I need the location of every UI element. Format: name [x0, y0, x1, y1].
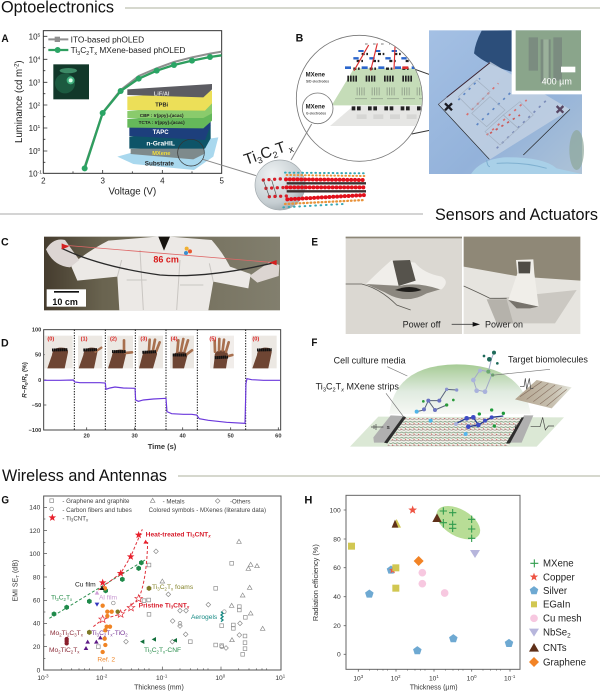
y axis tick labels [29, 328, 41, 434]
x axis tick labels: 3 [100, 176, 105, 185]
hand photo: state 4: (4) [171, 337, 178, 343]
label F: F [311, 337, 318, 349]
y axis tick labels [29, 32, 42, 179]
y axis tick labels: 50 [35, 353, 41, 359]
drain electrode [506, 415, 533, 443]
y axis title: Luminance (cd m [14, 69, 25, 143]
legend: - Metals [163, 499, 185, 506]
y axis tick labels: 100 [29, 551, 41, 558]
hand photo: state 2 [107, 336, 133, 368]
x axis tick labels: 10 [391, 676, 398, 683]
connector lines [412, 69, 487, 134]
x axis tick labels: 3 [361, 674, 364, 679]
label: power off to power on: Power on [485, 319, 523, 329]
device layer stack: TAPC [153, 130, 169, 136]
device layer stack: n-GraHIL [146, 140, 175, 147]
y axis title: ) [14, 60, 25, 64]
hand photo: state 4 [170, 336, 194, 368]
y axis tick labels: 60 [333, 565, 341, 572]
x axis tick labels: 5 [219, 176, 224, 185]
source electrode: S [387, 425, 390, 430]
y axis tick labels: 100 [330, 507, 341, 514]
panel A: luminance versus voltage chart [1, 31, 256, 198]
x axis tick labels [353, 674, 516, 683]
Ti3C2Tx rotated label: x [285, 144, 295, 156]
photo: power off [346, 237, 462, 334]
y axis title: (dB) [13, 560, 20, 575]
source electrode [373, 415, 406, 443]
data series labels: x [186, 605, 190, 610]
y axis title: -2 [15, 63, 21, 69]
legend: Colored symbols - MXenes (literature data) [149, 507, 266, 514]
y axis title: EMI SE [13, 578, 20, 602]
molecule illustration: Ti3C2Tx nanosheet [255, 160, 367, 210]
panel H: radiation efficiency scatter chart [304, 495, 586, 692]
legend: Graphene [543, 657, 586, 668]
device layer stack [117, 84, 218, 170]
x axis tick labels: 4 [160, 176, 165, 185]
data series labels: Cu film [75, 582, 96, 589]
silver markers [365, 565, 513, 654]
S/D electrode label [306, 72, 329, 83]
device layer stack: CBP : Ir(ppy)₂(acac) [140, 113, 184, 118]
data series labels: Mo [50, 630, 59, 637]
green dashed Ti3C2Tx trend [49, 560, 145, 618]
x axis tick labels: -3 [45, 673, 49, 678]
plot frame and ticks [44, 496, 281, 670]
data series labels: -TiO [113, 630, 125, 637]
copper markers [389, 505, 417, 573]
hand photo: state 0: (0) [47, 337, 54, 343]
data series labels: Mo [49, 647, 58, 654]
label: target biomolecules: Target biomolecules [508, 355, 588, 365]
x axis tick labels: 10 [215, 675, 223, 682]
Ti3C2Tx rotated label: Ti [242, 149, 259, 169]
data series labels: T [167, 584, 171, 591]
inset: green device photo [53, 64, 89, 99]
data series labels: T [159, 647, 163, 654]
legend [48, 34, 185, 57]
y axis title: (%) [22, 362, 29, 374]
data series labels: Heat-treated Ti [146, 531, 192, 538]
y axis tick labels: 20 [33, 644, 41, 651]
legend: Ti [71, 45, 77, 55]
legend: -Others [230, 499, 251, 506]
hand photo: state 5 [209, 336, 234, 368]
label: MXene strips [316, 381, 404, 417]
x axis tick labels: -1 [163, 673, 168, 678]
x axis tick labels: 2 [41, 176, 46, 185]
hand photo: state 1: (1) [81, 337, 88, 343]
label: cell culture media: Cell culture media [334, 356, 406, 366]
red dashed heat-treated trend [98, 529, 148, 590]
y axis tick labels: 10 [29, 101, 38, 110]
legend [529, 559, 586, 668]
data series labels: Ti [152, 584, 157, 591]
x axis tick labels: 10 [467, 676, 474, 683]
panel E: actuator photos [311, 236, 580, 334]
y axis tick labels: 10 [29, 124, 38, 133]
y axis tick labels: −50 [32, 403, 41, 409]
inset microscope image [512, 30, 584, 94]
y axis tick labels: 80 [33, 574, 41, 581]
data series labels: x [207, 534, 211, 539]
legend: MXene-based phOLED [97, 45, 185, 55]
x axis tick labels: 10 [96, 675, 103, 682]
graphene marker [414, 556, 424, 566]
y axis title: 0 [24, 382, 29, 385]
legend: 3 [77, 51, 80, 57]
y axis tick labels: 2 [38, 101, 41, 107]
y axis tick labels: −100 [29, 428, 41, 434]
plot frame and ticks [43, 31, 222, 173]
data series labels: 2 [125, 632, 128, 637]
molecule: upper [471, 351, 499, 394]
legend: - Carbon fibers and tubes [62, 507, 132, 514]
drain electrode: D [515, 424, 519, 429]
data series labels: 3 [97, 632, 100, 637]
x axis tick labels: 2 [398, 674, 401, 679]
x axis tick labels: 10 [504, 676, 511, 683]
legend [49, 498, 266, 523]
panel B: flexible MXene transistor arrays [291, 30, 584, 174]
x axis tick labels: 10 [156, 675, 163, 682]
label C: C [1, 236, 9, 248]
grey ITO curve [85, 52, 222, 167]
y axis tick labels: 0 [37, 667, 41, 674]
legend: ITO-based phOLED [71, 34, 144, 44]
label: power off to power on: Power off [403, 319, 441, 329]
y axis tick labels: 0 [337, 652, 341, 659]
data series labels: T [66, 595, 70, 602]
data series labels: Ti [62, 630, 67, 637]
data series labels: C [99, 630, 104, 637]
x axis tick labels: 0 [223, 673, 226, 678]
hand photo: state 3 [138, 336, 163, 368]
label: MXene strips: 2 [332, 387, 336, 393]
device layer stack: TPBi [155, 103, 169, 109]
Ti3C2Tx rotated label: 3 [256, 155, 264, 166]
y axis tick labels: 140 [29, 505, 41, 512]
label A: A [1, 33, 9, 45]
label: MXene strips: Ti [316, 381, 323, 391]
y axis tick labels: 3 [38, 78, 41, 84]
y axis tick labels: 120 [29, 528, 41, 535]
legend: Silver [543, 586, 568, 597]
y axis tick labels: 60 [33, 598, 41, 605]
x axis title: Thickness (µm) [410, 685, 458, 692]
hand photo: state 0 repeated [252, 336, 277, 368]
data series labels: 2 [64, 597, 67, 602]
label: target biomolecules [492, 355, 588, 375]
data series labels: 3 [56, 597, 59, 602]
culture media dome [389, 364, 531, 414]
device layer stack: TCTA : Ir(ppy)₂(acac) [139, 120, 185, 125]
legend: C [80, 45, 86, 55]
data series labels: C [69, 630, 74, 637]
data series labels: 2 [58, 649, 61, 654]
x axis tick labels: 10 [429, 676, 436, 683]
data series labels: TiC [61, 647, 71, 654]
y axis tick labels [330, 507, 341, 659]
legend: MXene [543, 559, 574, 570]
legend: x [85, 518, 89, 523]
Ti3C2Tx rotated label: T [274, 139, 289, 158]
label: power off to power on [403, 319, 523, 329]
data series labels: 2 [165, 586, 168, 591]
x axis tick labels: -2 [103, 673, 108, 678]
y axis title: R [22, 376, 29, 381]
data series labels: T [73, 647, 77, 654]
signal traces [371, 417, 554, 430]
connector line to molecule [203, 159, 256, 176]
x axis tick labels [84, 434, 281, 440]
x axis tick labels: 0 [474, 674, 477, 679]
label G: G [1, 494, 9, 506]
legend: - Graphene and graphite [62, 498, 130, 505]
data series labels: 3 [157, 586, 160, 591]
hand photo: state 1 [78, 336, 102, 368]
sensor mesh inset [515, 378, 572, 408]
grey reference triangles [160, 539, 265, 642]
molecule: on channel [454, 408, 505, 436]
heading: Wireless and Antennas: Wireless and Antennas [2, 467, 167, 485]
y axis title: / [22, 381, 29, 383]
data series labels: 2 [104, 632, 107, 637]
legend: 3 [71, 518, 74, 523]
data series labels: C [152, 647, 157, 654]
x axis tick labels: 50 [228, 434, 234, 440]
data series labels: -CNF [165, 647, 181, 654]
legend: NbSe [543, 627, 567, 638]
connector to molecule [291, 124, 312, 160]
grey reference diamonds and circles [111, 549, 242, 650]
device layer stack: LiF/Al [154, 91, 170, 97]
divider line [0, 213, 423, 215]
x axis tick labels: 10 [275, 675, 283, 682]
label: MXene strips: MXene strips [344, 381, 399, 391]
y axis tick labels: 40 [333, 594, 341, 601]
legend: 2 [567, 632, 571, 639]
hand photo: state 3: (3) [140, 337, 147, 343]
photograph [44, 237, 280, 310]
x axis tick labels [37, 673, 286, 682]
red dashed pristine trend [93, 542, 148, 627]
data series labels: foams [173, 584, 194, 591]
magnified device circle [296, 35, 423, 161]
G electrode callout circle: MXene [306, 104, 326, 110]
legend: x [94, 51, 97, 57]
hand photo: state 0 repeated: (0) [252, 337, 259, 343]
NbSe2 marker [470, 550, 480, 558]
y axis tick labels: 80 [333, 536, 341, 543]
MXene plus markers [440, 507, 475, 542]
data series labels [49, 531, 218, 663]
G electrode callout circle [302, 93, 333, 124]
legend: 2 [86, 51, 89, 57]
panel D: finger motion sensing chart [1, 328, 281, 440]
x axis tick labels: 60 [275, 434, 281, 440]
x axis tick labels: -1 [511, 674, 516, 679]
y axis title: Radiation efficiency (%) [311, 544, 320, 621]
label: MXene strips: 3 [323, 387, 326, 393]
data series labels: C [59, 595, 64, 602]
label: MXene strips: C [326, 381, 333, 391]
hand photo: state 5: (5) [209, 337, 216, 343]
x axis title: Thickness (mm) [134, 685, 184, 692]
data series labels: Ti [51, 595, 56, 602]
label: cell culture media [334, 356, 407, 376]
Ti3C2Tx rotated label: 2 [271, 149, 279, 160]
S/D electrode label: S/D electrodes [306, 79, 329, 83]
y axis tick labels: 10 [29, 78, 38, 87]
legend: - Ti [62, 515, 71, 522]
y axis tick labels: 0 [38, 147, 41, 153]
data series labels: 2 [59, 632, 62, 637]
data series labels: T [106, 630, 110, 637]
x axis title: Voltage (V) [108, 187, 156, 198]
heading: Sensors and Actuators: Sensors and Actuators [435, 206, 598, 224]
x axis tick labels: 10 [353, 676, 361, 683]
data series labels: 3 [149, 649, 152, 654]
molecule: lower left [415, 388, 458, 423]
green MXene curve [82, 54, 222, 171]
panel D x axis title: Time (s) [148, 442, 177, 451]
device layer stack: MXene [152, 151, 170, 157]
resistance response line [44, 379, 280, 423]
x axis tick labels [41, 176, 224, 185]
legend: Cu mesh [543, 614, 582, 625]
data series labels: 2 [67, 632, 70, 637]
y axis title: 0 [24, 373, 29, 376]
hand photo: state 0 [45, 336, 73, 368]
y axis tick labels: 4 [38, 55, 41, 61]
y axis tick labels: 100 [32, 328, 41, 334]
y axis tick labels: -1 [38, 170, 42, 176]
panel G: EMI shielding scatter chart [1, 494, 286, 692]
data series labels: 2 [71, 649, 74, 654]
data series labels: C [160, 584, 165, 591]
label: MXene strips: x [340, 387, 344, 393]
MXene channel [387, 418, 523, 446]
y axis tick labels: 40 [33, 621, 41, 628]
x axis tick labels: 30 [132, 434, 138, 440]
x axis tick labels: 1 [436, 674, 439, 679]
legend: Copper [543, 572, 575, 583]
data series labels: Pristine Ti [139, 602, 171, 609]
panel C: stretched fibre photo [1, 236, 280, 310]
y axis tick labels: 0 [38, 378, 41, 384]
data series labels: T [77, 630, 81, 637]
data series labels: CNT [173, 602, 187, 609]
coloured MXene markers [64, 586, 223, 654]
data series labels: x [110, 632, 113, 637]
photograph: 86 cm [153, 255, 179, 265]
data series labels: Al film [99, 595, 118, 602]
MXene highlight ellipse [431, 499, 486, 546]
y axis tick labels: 5 [38, 32, 41, 38]
legend: CNT [73, 515, 86, 522]
label: MXene strips: T [336, 381, 342, 391]
x axis tick labels: 40 [180, 434, 186, 440]
y axis tick labels: 10 [29, 32, 38, 41]
y axis title: R−R [22, 385, 29, 398]
label B: B [296, 32, 303, 44]
plot frame and ticks [344, 495, 520, 672]
legend: CNTs [543, 643, 567, 654]
scale bar: 10 cm [52, 297, 78, 307]
photo: power on [464, 237, 580, 334]
x axis tick labels: 20 [84, 434, 90, 440]
x axis tick labels: 1 [283, 673, 286, 678]
data series labels: 3 [192, 534, 195, 539]
grey reference squares [96, 561, 247, 656]
y axis tick labels: 10 [29, 55, 38, 64]
device layer stack: Substrate [145, 160, 174, 167]
inset microscope image: 400 µm [542, 77, 572, 87]
S/D electrode label: MXene [306, 72, 326, 78]
data series labels: 2 [157, 649, 160, 654]
data series labels: Ti [144, 647, 149, 654]
Cu mesh markers [418, 569, 448, 597]
CNT markers [392, 513, 442, 528]
y axis title: T [15, 575, 20, 578]
data series labels: 3 [171, 605, 174, 610]
label H: H [304, 495, 312, 507]
y axis tick labels: 1 [38, 124, 41, 130]
Ti3C2Tx rotated label: C [258, 143, 274, 163]
data series labels: x [77, 649, 80, 654]
EGaIn markers [348, 519, 401, 592]
G electrode callout circle: G electrodes [306, 111, 326, 115]
data series labels: x [171, 586, 174, 591]
label E: E [311, 236, 318, 248]
data series labels: Aerogels [191, 614, 218, 621]
panel F: biosensor schematic [311, 337, 588, 447]
data series labels: x [163, 649, 166, 654]
y axis tick labels: 20 [333, 623, 341, 630]
plot frame and dividers [44, 330, 281, 430]
data series labels: x [81, 632, 84, 637]
scale bar [47, 289, 86, 307]
hand photo: state 2: (2) [110, 337, 117, 343]
sensor plate [350, 417, 564, 447]
data series labels: CNT [195, 531, 208, 538]
x axis tick labels: 10 [37, 675, 45, 682]
data series labels: x [70, 597, 73, 602]
y axis tick labels: 10 [29, 147, 38, 156]
legend: T [89, 45, 94, 55]
y axis tick labels: 10 [29, 170, 38, 179]
data series labels: Ti [91, 630, 97, 637]
data series labels: 3 [74, 632, 77, 637]
legend: EGaIn [543, 600, 570, 611]
y axis tick labels [29, 505, 41, 674]
data series labels: Ref. 2 [97, 656, 115, 663]
photo of flexible device held by gloves [429, 30, 584, 174]
label D: D [1, 338, 9, 350]
